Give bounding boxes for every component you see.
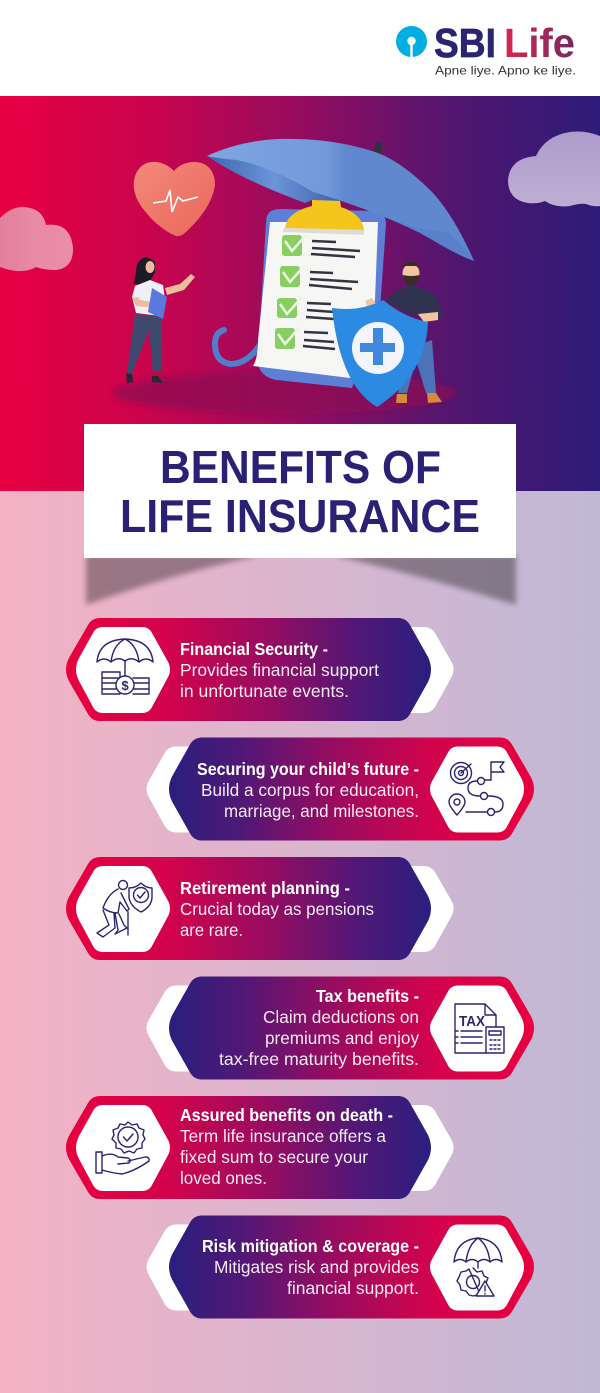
man torso [385,285,443,318]
text: child's future: Securing your child’s future - [197,759,419,779]
icon: goal roadmap [449,762,504,816]
text: assured benefits: Term life insurance offers a [180,1126,386,1146]
icon: dollar sign: $ [122,678,130,693]
text: assured benefits: Assured benefits on death - [180,1105,393,1125]
woman top [132,280,165,316]
text: risk mitigation: financial support. [287,1278,419,1298]
icon: heart with pulse [134,162,215,236]
text: tax benefits: premiums and enjoy [265,1028,419,1048]
logo: SBI Life [396,20,576,78]
panel: hero background [0,96,600,491]
icon: purple cloud [508,132,600,206]
checklist rows [275,234,360,349]
man legs [398,340,436,393]
panel: tax benefits [146,976,534,1080]
woman face [146,261,154,273]
heading: benefits of: BENEFITS OF [160,441,441,493]
icon: umbrella hook [215,330,262,364]
text: tax benefits: Claim deductions on [263,1007,419,1027]
text: risk mitigation [202,1236,419,1298]
text: child's future [197,759,419,821]
text: financial security: Provides financial support [180,660,379,680]
icon: umbrella, gear and warning [454,1238,502,1296]
icon: tax document and calculator [455,1004,504,1053]
text: assured benefits [180,1105,393,1188]
illustration: woman [126,257,195,383]
panel: financial security [66,618,454,721]
text: risk mitigation: Risk mitigation & coverage - [202,1236,419,1256]
woman legs [127,314,162,373]
icon: blue shield with cross [332,300,428,407]
text: child's future: marriage, and milestones. [224,801,419,821]
icon: elderly man with shield [97,880,152,937]
panel: child's future [146,738,534,840]
text: tax benefits: tax-free maturity benefits. [219,1049,419,1069]
heading: life insurance: LIFE INSURANCE [120,490,480,542]
header background [0,0,600,96]
panel: retirement planning [66,857,454,960]
text: financial security: Financial Security - [180,639,328,659]
woman shoes [126,373,163,383]
text: retirement planning [180,878,374,940]
woman folder [148,288,167,319]
clipboard board [258,209,386,388]
ground shadow [113,372,457,414]
text: assured benefits: loved ones. [180,1168,267,1188]
text: risk mitigation: Mitigates risk and provides [214,1257,419,1277]
man shoes [396,393,442,403]
icon: SBI keyhole circle [396,26,427,58]
panel: lower background [0,491,600,1393]
text: retirement planning: are rare. [180,920,243,940]
woman arm [132,274,195,308]
man head [402,264,420,282]
text: retirement planning: Crucial today as pensions [180,899,374,919]
text: tax benefits [219,986,419,1069]
panel: assured benefits on death [66,1096,454,1199]
text: retirement planning: Retirement planning - [180,878,350,898]
icon label: TAX: TAX [459,1014,485,1030]
logo tagline: Apne liye. Apno ke liye. [435,64,576,78]
illustration: umbrella canopy [207,139,474,261]
text: child's future: Build a corpus for education, [201,780,419,800]
woman hair [133,257,155,285]
illustration: clipboard [253,198,386,388]
logo wordmark SBI: SBI [434,20,496,66]
clipboard yellow clip [285,198,364,230]
logo wordmark Life: Life [504,20,575,66]
text: tax benefits: Tax benefits - [316,986,419,1006]
illustration: man [365,262,443,403]
panel: risk mitigation [146,1216,534,1318]
title panel [84,424,516,558]
icon: hand with badge [96,1122,149,1174]
clipboard paper [253,222,378,378]
text: financial security [180,639,379,701]
title shadow [86,555,516,605]
text: financial security: in unfortunate events. [180,681,349,701]
man hands [365,298,438,322]
text: assured benefits: fixed sum to secure your [180,1147,368,1167]
icon: pink cloud [0,207,73,271]
icon: umbrella and coins [97,639,153,694]
